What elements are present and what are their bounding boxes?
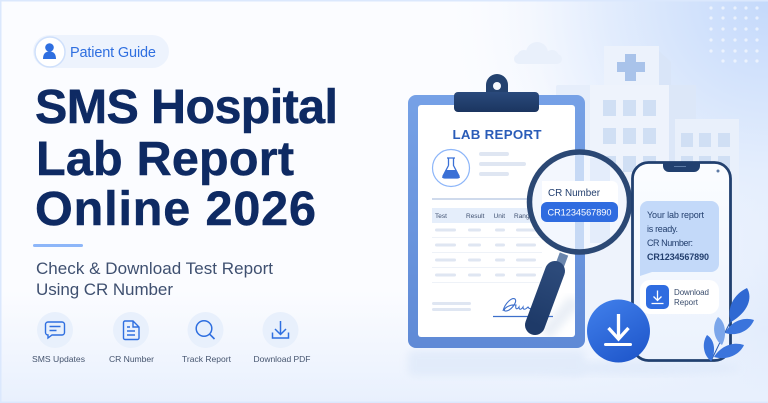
title: Lab Report	[36, 132, 294, 186]
results table	[432, 208, 542, 283]
results table: Test	[435, 213, 447, 220]
sms bubble: Your lab report	[647, 210, 704, 220]
download button	[587, 300, 650, 362]
sms bubble: CR Number:	[647, 238, 693, 248]
magnifier lens	[530, 152, 630, 252]
icon: download small	[646, 285, 669, 309]
badge: Patient Guide	[33, 35, 169, 68]
title	[35, 80, 338, 236]
floor reflections	[408, 350, 740, 376]
clipboard	[408, 74, 585, 348]
feature: Track Report	[182, 312, 232, 364]
results table: Result	[466, 213, 485, 220]
subtitle: Using CR Number	[36, 280, 173, 299]
feature: SMS Updates: SMS Updates	[32, 354, 85, 364]
feature: CR Number	[109, 312, 154, 364]
CR number card: CR Number	[548, 188, 601, 199]
phone notch	[663, 163, 720, 172]
summary lines	[479, 152, 526, 176]
badge: Patient Guide: Patient Guide	[70, 45, 156, 61]
subtitle: Check & Download Test Report	[36, 259, 273, 278]
results table: Range	[514, 213, 534, 220]
title: SMS Hospital	[35, 80, 338, 134]
clip	[454, 74, 539, 112]
feature: SMS Updates	[32, 312, 85, 364]
feature: Download PDF	[254, 312, 310, 364]
icon: patient	[35, 37, 65, 67]
download card: Report	[674, 298, 699, 307]
sms bubble: CR1234567890	[647, 252, 709, 262]
CR number card	[541, 181, 618, 222]
phone	[632, 162, 730, 360]
cloud	[514, 42, 562, 64]
dot pattern	[709, 6, 759, 63]
magnifier neck	[558, 254, 564, 270]
sms bubble: is ready.	[647, 224, 678, 234]
hospital building	[556, 46, 739, 340]
magnifying glass	[530, 152, 630, 335]
paper sheet	[418, 105, 575, 337]
accent divider	[33, 244, 83, 247]
magnifier handle	[535, 271, 555, 325]
report heading: LAB REPORT	[452, 127, 542, 142]
icon: flask	[432, 150, 470, 186]
feature: Track Report: Track Report	[182, 354, 232, 364]
title: Online 2026	[35, 182, 316, 236]
plant leaves	[704, 288, 754, 361]
signature	[493, 299, 553, 316]
feature: Download PDF: Download PDF	[254, 354, 310, 364]
feature: CR Number: CR Number	[109, 354, 154, 364]
footer lines	[432, 302, 471, 311]
results table: Unit	[494, 213, 505, 220]
download card	[640, 280, 719, 314]
subtitle	[36, 259, 273, 299]
download card: Download	[674, 288, 709, 297]
sms bubble	[640, 201, 719, 276]
CR number card: CR1234567890	[548, 208, 612, 218]
